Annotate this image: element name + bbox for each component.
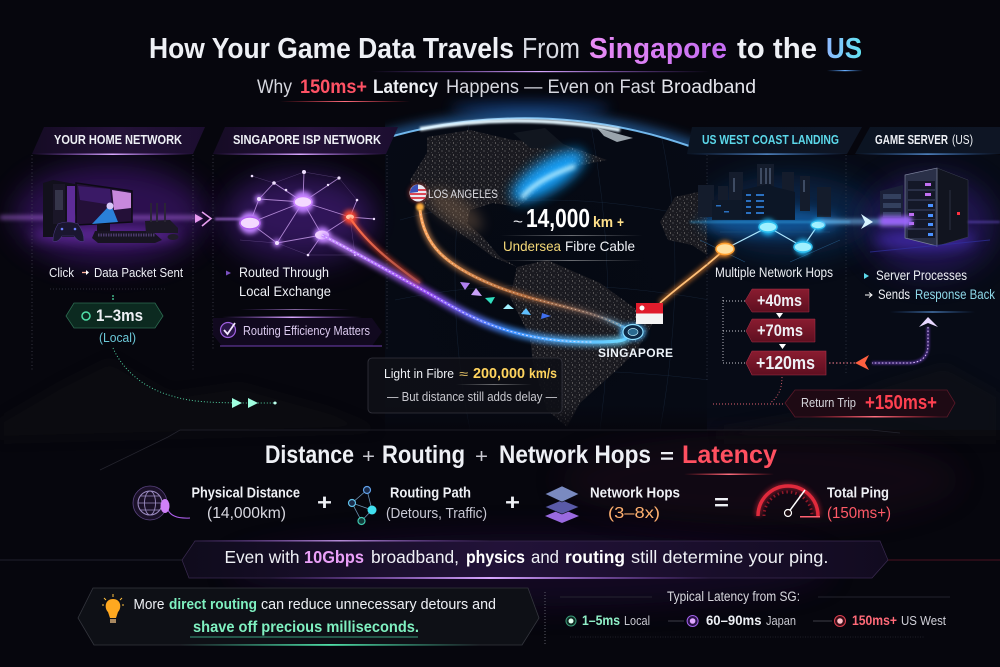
callout: 14000 km undersea fibre: + [617,214,624,231]
title: From [522,33,580,65]
heading: latency formula: Distance [265,441,354,469]
header: us west coast landing: US WEST COAST LANDING [702,133,839,147]
tower [43,180,75,237]
header: singapore isp network: SINGAPORE ISP NETWORK [233,133,381,147]
callout: light in fibre: — But distance still adds delay — [387,390,557,404]
marker: singapore: SINGAPORE [598,346,673,360]
text: server processes: Server Processes [876,268,967,283]
ambient glows [15,101,1000,606]
connector triangle [779,344,786,349]
heading: latency formula: = [660,446,674,468]
globe grid [395,120,710,430]
legend item: japan: Japan [766,613,796,628]
text: routed through local exchange: Routed Through [239,264,329,280]
badge: return trip: Return Trip [801,396,856,410]
badge: 1-3ms local: (Local) [99,330,136,345]
panel: direct routing tip: direct routing [169,596,257,613]
marker: singapore [598,303,673,360]
formula frame [100,430,900,470]
banner: broadband message: still determine your ping. [631,547,828,567]
item: routing path: (Detours, Traffic) [386,506,487,522]
badge: +70ms [746,319,815,342]
header: game server [855,127,1000,155]
latency equation row [133,486,891,524]
callout: light in fibre: ≈ [459,367,469,381]
panel: direct routing tip: can reduce unnecessary detours and [261,596,496,613]
title: How Your Game Data Travels [149,33,514,65]
data packet triangles [460,282,551,319]
text: routed through local exchange: Local Exchange [239,283,331,299]
badge: return trip [713,377,955,418]
legend: typical latency from sg [545,589,950,645]
legend item: japan: 60–90ms [706,612,762,628]
panel guide lines [213,155,387,350]
operator: equals: = [714,490,729,515]
beam into server [820,220,910,223]
heading: latency formula: Network Hops [499,441,651,469]
icon: gaming pc setup [0,180,200,244]
badge: 1-3ms local: 1–3ms [96,307,143,325]
east coast glow [504,141,592,211]
badge: +120ms: +120ms [756,352,815,373]
banner: broadband message: and [531,547,559,567]
badge: +70ms: +70ms [757,322,803,340]
legend item: local: 1–5ms [582,612,620,628]
banner: broadband message: Even with [224,547,300,567]
callout: light in fibre: Light in Fibre [384,366,454,381]
panel: direct routing tip [78,588,539,646]
callout: routing efficiency [213,316,382,346]
legend: typical latency from sg: Typical Latency from SG: [667,589,800,604]
title: US [826,33,862,65]
panel: singapore isp network [213,127,398,350]
legend item: japan [687,612,796,628]
heading: latency formula: Routing [382,441,465,469]
connector triangle [776,313,783,318]
mountain texture [0,360,1000,440]
callout: light in fibre: km/s [529,365,557,381]
cable: orange singapore to us west [660,249,725,303]
callout: light in fibre [368,358,562,413]
header: your home network: YOUR HOME NETWORK [54,133,182,147]
callout: 14000 km undersea fibre: km [593,214,613,231]
callout: 14000 km undersea fibre: Undersea [503,238,561,254]
heading: latency formula: + [475,446,488,468]
subtitle: Why [257,77,292,98]
continent: Africa [660,190,707,255]
legend item: us west: US West [901,613,946,628]
controller [53,222,84,241]
banner: broadband message: physics [466,547,525,567]
cable: orange la to singapore [420,210,625,328]
arrow: response return [828,317,938,370]
item: physical distance: (14,000km) [207,505,286,522]
item: network hops: (3–8x) [608,505,660,522]
heading: latency formula [265,441,777,475]
subtitle: Happens — Even on Fast [446,77,656,98]
item: physical distance: Physical Distance [192,486,300,502]
legend item: local [566,612,650,628]
text: server processes: Sends [878,287,910,302]
item: physical distance [133,486,300,522]
title: Singapore [589,33,727,65]
header: game server: GAME SERVER [875,133,948,147]
continent: Greenland [597,128,633,142]
item: network hops: Network Hops [590,486,680,502]
network hops diagram [716,219,825,257]
icon: speedometer [758,486,891,522]
subtitle: Latency [373,77,438,98]
subtitle: 150ms+ [300,77,367,98]
text: click data packet sent [49,265,183,301]
legend item: us west: 150ms+ [852,612,897,628]
panel: direct routing tip: shave off precious milliseconds. [193,619,419,636]
banner: broadband message [0,540,1000,579]
arrow: home to isp [195,212,211,226]
bottom fade [467,406,663,430]
banner: broadband message: routing [565,547,625,567]
legend item: us west [834,612,946,628]
panel guide lines [32,155,193,370]
west glow [425,184,486,236]
globe [385,105,707,426]
title [149,33,863,72]
marker: los angeles: LOS ANGELES [428,187,498,201]
continent: North America [410,130,607,267]
network diagram [215,170,375,256]
cable: purple blue [322,235,627,342]
item: network hops [545,486,680,523]
limb [394,117,689,147]
callout: light in fibre: 200,000 [473,365,525,382]
panel: game server [820,127,1000,370]
panel guide lines [707,155,846,380]
icon: speedometer: Total Ping [827,486,889,502]
badge: 1-3ms local [66,303,163,345]
title: to the [737,33,817,65]
heading: latency formula: Latency [682,441,777,469]
router [145,220,178,233]
icon: speedometer: (150ms+) [827,505,891,522]
subtitle [257,77,756,102]
undersea cables [322,210,725,342]
panel: us west coast landing [687,127,862,380]
header: game server: (US) [952,133,973,147]
callout: routing efficiency: Routing Efficiency Matters [243,324,370,338]
badge: +40ms: +40ms [757,292,802,310]
cable: red [350,218,420,283]
operator: plus: + [317,490,332,515]
heading: latency formula: + [362,446,375,468]
text: routed through local exchange [226,264,350,310]
badge: return trip: +150ms+ [865,392,937,414]
badge: +40ms [745,289,809,312]
marker: los angeles [409,184,498,211]
banner: broadband message: broadband, [371,547,459,567]
text: click data packet sent: Click [49,265,74,280]
callout: 14000 km undersea fibre: 14,000 [526,203,590,233]
arrow: dotted green path [113,348,277,408]
continent: South America [510,260,653,427]
mouse [168,234,178,240]
header: your home network [32,127,205,155]
callout: 14000 km undersea fibre: Fibre Cable [565,238,635,254]
banner: broadband message: 10Gbps [304,547,364,567]
monitor [76,183,132,225]
illustration: server rack [820,168,1000,252]
header: singapore isp network [213,127,398,155]
hop bracket [723,297,745,363]
legend item: local: Local [624,613,650,628]
item: routing path: Routing Path [390,486,471,502]
text: server processes [864,268,995,312]
text: multiple network hops: Multiple Network Hops [715,265,833,280]
panel: direct routing tip: More [134,596,164,613]
callout: 14000 km undersea fibre [500,203,643,261]
item: routing path [348,486,487,524]
operator: plus: + [505,490,520,515]
keyboard [92,231,162,243]
icon: light bulb [102,594,124,623]
header: us west coast landing [687,127,862,155]
subtitle: Broadband [661,77,756,98]
illustration: city skyline and data centre [690,164,850,262]
text: click data packet sent: Data Packet Sent [94,265,183,280]
panel: your home network [0,127,277,408]
callout: 14000 km undersea fibre: ~ [513,214,523,231]
